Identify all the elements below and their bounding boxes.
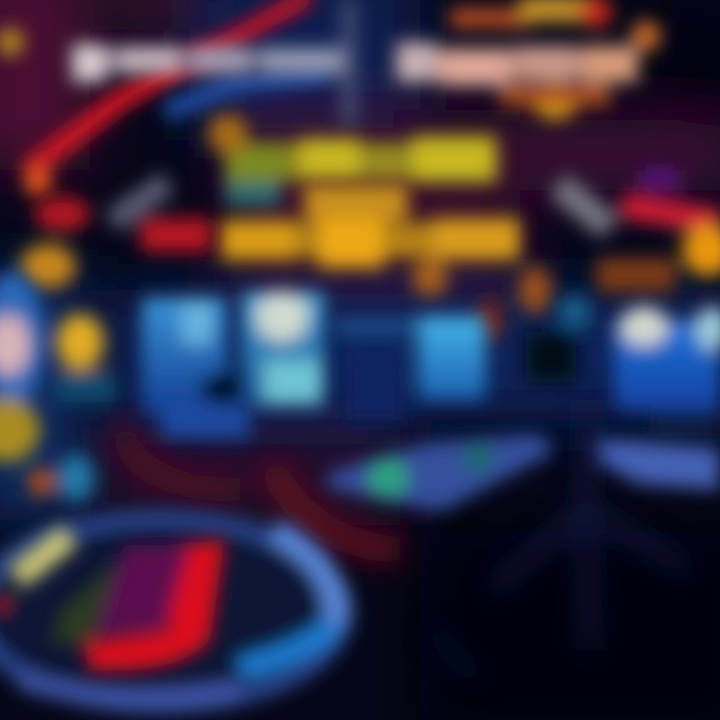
title: right pink text band [396,0,661,119]
gauge red segment [52,540,225,671]
panel: lavender platform centre [325,434,555,512]
title: left white text band [72,0,358,125]
chart: ring gauge [0,518,345,706]
gauge ring [0,518,345,706]
heading: yellow text line two [220,184,552,342]
panel: lavender platform right [596,438,720,490]
panel: blue card one [142,298,250,438]
panel: blue card two [242,290,324,408]
header: blue diagonal stripe [165,72,330,112]
faint network lines bottom right [430,400,690,680]
icon: corner yellow spot [0,28,24,56]
left column figure [0,272,115,502]
left header accents: grey and red bars [20,182,212,288]
right header accents: grey bar and rainbow band [558,170,720,292]
dark red arcs [120,430,400,550]
heading: yellow text line one [208,114,497,206]
header: red diagonal streak [24,0,310,196]
panel: dark column [526,295,592,382]
panel: blue card three [335,316,486,420]
gauge yellow marker [0,535,70,615]
panel: blue card right [614,306,720,436]
